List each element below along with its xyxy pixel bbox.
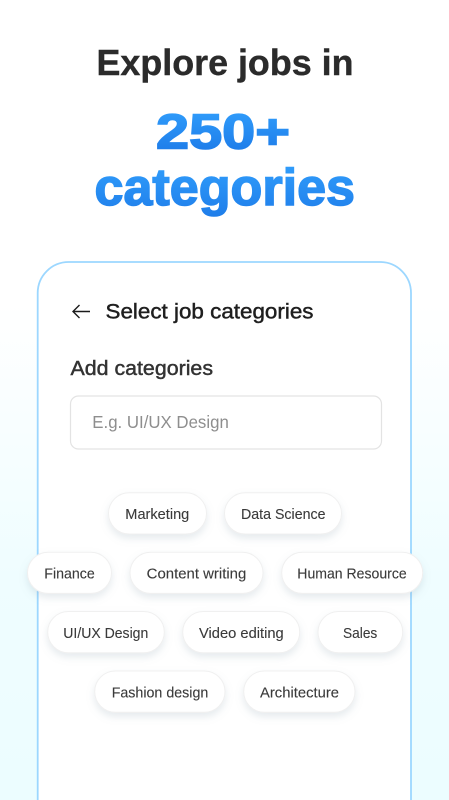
chip: Video editing: Video editing <box>199 626 284 642</box>
chip group: job categories <box>28 493 423 712</box>
chip: Architecture: Architecture <box>260 686 339 702</box>
chip: Finance <box>28 552 112 593</box>
icon: back arrow <box>73 305 90 318</box>
heading: Explore jobs in: Explore jobs in <box>96 42 354 83</box>
section label: Add categories: Add categories <box>70 358 213 380</box>
chip: Sales <box>318 612 403 653</box>
chip: Fashion design: Fashion design <box>112 686 208 702</box>
input placeholder: E.g. UI/UX Design <box>92 412 229 432</box>
chip: Content writing: Content writing <box>147 566 246 582</box>
chip: Marketing: Marketing <box>125 507 189 523</box>
panel: phone screen card <box>38 262 411 800</box>
chip: Data Science <box>224 493 342 534</box>
heading: 250+: 250+ <box>156 105 290 159</box>
input field <box>70 396 382 449</box>
chip: Architecture <box>244 671 355 712</box>
chip: Video editing <box>183 612 300 653</box>
chip: Finance: Finance <box>44 566 95 582</box>
chip: Human Resource <box>282 552 423 593</box>
chip: UI/UX Design <box>48 612 164 653</box>
heading: categories: categories <box>94 159 355 217</box>
chip: Fashion design <box>95 671 225 712</box>
chip: Sales: Sales <box>343 626 377 642</box>
chip: Marketing <box>108 493 206 534</box>
chip: Content writing <box>130 552 263 593</box>
screen title: Select job categories <box>106 300 314 324</box>
chip: Human Resource: Human Resource <box>297 566 407 582</box>
chip: UI/UX Design: UI/UX Design <box>63 626 148 642</box>
chip: Data Science: Data Science <box>241 507 326 523</box>
